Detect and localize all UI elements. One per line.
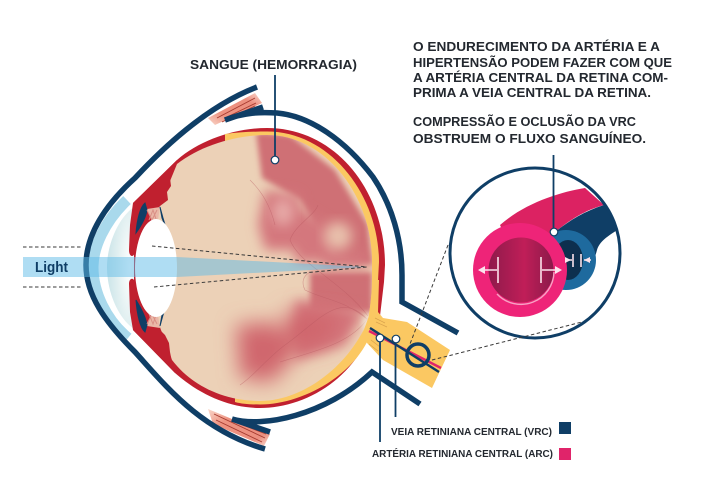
swatch: arc bbox=[559, 448, 571, 460]
choroid red wall bbox=[133, 128, 385, 408]
light beam bbox=[23, 257, 367, 277]
line bbox=[394, 339, 396, 417]
lens bbox=[135, 219, 177, 317]
legend: arc: ARTÉRIA RETINIANA CENTRAL (ARC) bbox=[372, 447, 553, 460]
dashed guide lines bbox=[23, 246, 367, 287]
circle outline bbox=[450, 168, 620, 338]
artery tube bbox=[500, 188, 604, 234]
circle background bbox=[450, 168, 620, 338]
explanation text: COMPRESSÃO E OCLUSÃO DA VRC bbox=[413, 114, 636, 129]
legend: vrc: VEIA RETINIANA CENTRAL (VRC) bbox=[391, 427, 552, 438]
muscle band bbox=[208, 409, 270, 446]
dot bbox=[271, 156, 279, 164]
red ciliary body bbox=[129, 160, 177, 256]
dot bbox=[392, 335, 400, 343]
cornea blue band bbox=[93, 200, 128, 338]
central vein bbox=[370, 328, 439, 372]
iris and ciliary top bbox=[129, 160, 177, 256]
explanation text: O ENDURECIMENTO DA ARTÉRIA E A bbox=[413, 39, 660, 54]
lumen highlight bbox=[497, 272, 554, 304]
leader: compression bbox=[550, 155, 558, 236]
suspensory patch bbox=[147, 313, 160, 328]
explanation text: OBSTRUEM O FLUXO SANGUÍNEO. bbox=[413, 131, 646, 146]
vein wall bbox=[552, 230, 596, 290]
suspensory patch bbox=[147, 207, 160, 222]
vein lumen bbox=[559, 240, 583, 280]
optic nerve bbox=[362, 280, 450, 388]
retinal veins bbox=[240, 180, 368, 385]
suspensory hatch bbox=[147, 314, 157, 324]
vitreous beige bbox=[150, 135, 372, 401]
muscle fibres bbox=[214, 414, 266, 442]
muscle top bbox=[208, 93, 262, 125]
muscle fibres bbox=[217, 98, 256, 122]
dot bbox=[376, 334, 384, 342]
artery lumen bbox=[488, 238, 554, 302]
muscle band bbox=[208, 93, 262, 125]
vein tube bbox=[558, 205, 616, 290]
optic disc glow bbox=[363, 315, 377, 333]
infographic: eye with central retinal vein occlusion bbox=[23, 40, 672, 460]
aqueous chamber bbox=[107, 207, 134, 329]
line bbox=[379, 338, 381, 442]
legend bbox=[372, 422, 571, 460]
retina yellow layer bbox=[225, 132, 379, 404]
suspensory hatch bbox=[147, 210, 157, 220]
line bbox=[552, 155, 554, 232]
iris and ciliary bottom bbox=[129, 279, 175, 373]
muscle bottom bbox=[208, 409, 270, 446]
swatch: vrc bbox=[559, 422, 571, 434]
explanation text: PRIMA A VEIA CENTRAL DA RETINA. bbox=[413, 86, 651, 100]
eyeball bbox=[133, 128, 385, 408]
central artery bbox=[369, 331, 441, 368]
label: sangue: SANGUE (HEMORRAGIA) bbox=[190, 58, 357, 72]
leader: sangue bbox=[271, 75, 279, 164]
zoom dashed lines bbox=[410, 245, 582, 360]
sclera upper arc bbox=[225, 107, 458, 333]
detail circle bbox=[450, 168, 625, 338]
beam band bbox=[23, 257, 367, 277]
navy wedge bbox=[136, 300, 166, 332]
line bbox=[274, 75, 276, 160]
red ciliary body bbox=[129, 279, 175, 373]
sclera lower arc bbox=[232, 372, 420, 432]
navy wedge bbox=[136, 203, 166, 233]
zoom ring bbox=[407, 344, 429, 366]
arrow heads bbox=[478, 257, 590, 274]
artery wall bbox=[473, 223, 567, 317]
vessel tubes bbox=[500, 188, 625, 290]
explanation text: A ARTÉRIA CENTRAL DA RETINA COM- bbox=[413, 70, 668, 85]
nerve sheath bbox=[362, 280, 450, 388]
sclera outer line bbox=[86, 87, 265, 449]
leader: vrc bbox=[392, 335, 400, 417]
hemorrhage patches bbox=[236, 132, 372, 382]
light label: Light bbox=[35, 259, 68, 276]
dot bbox=[550, 228, 558, 236]
leader: arc bbox=[376, 334, 384, 442]
sheath fibres bbox=[369, 318, 387, 351]
explanation text bbox=[413, 39, 672, 146]
explanation text: HIPERTENSÃO PODEM FAZER COM QUE bbox=[413, 55, 672, 70]
diameter arrows bbox=[480, 254, 591, 283]
